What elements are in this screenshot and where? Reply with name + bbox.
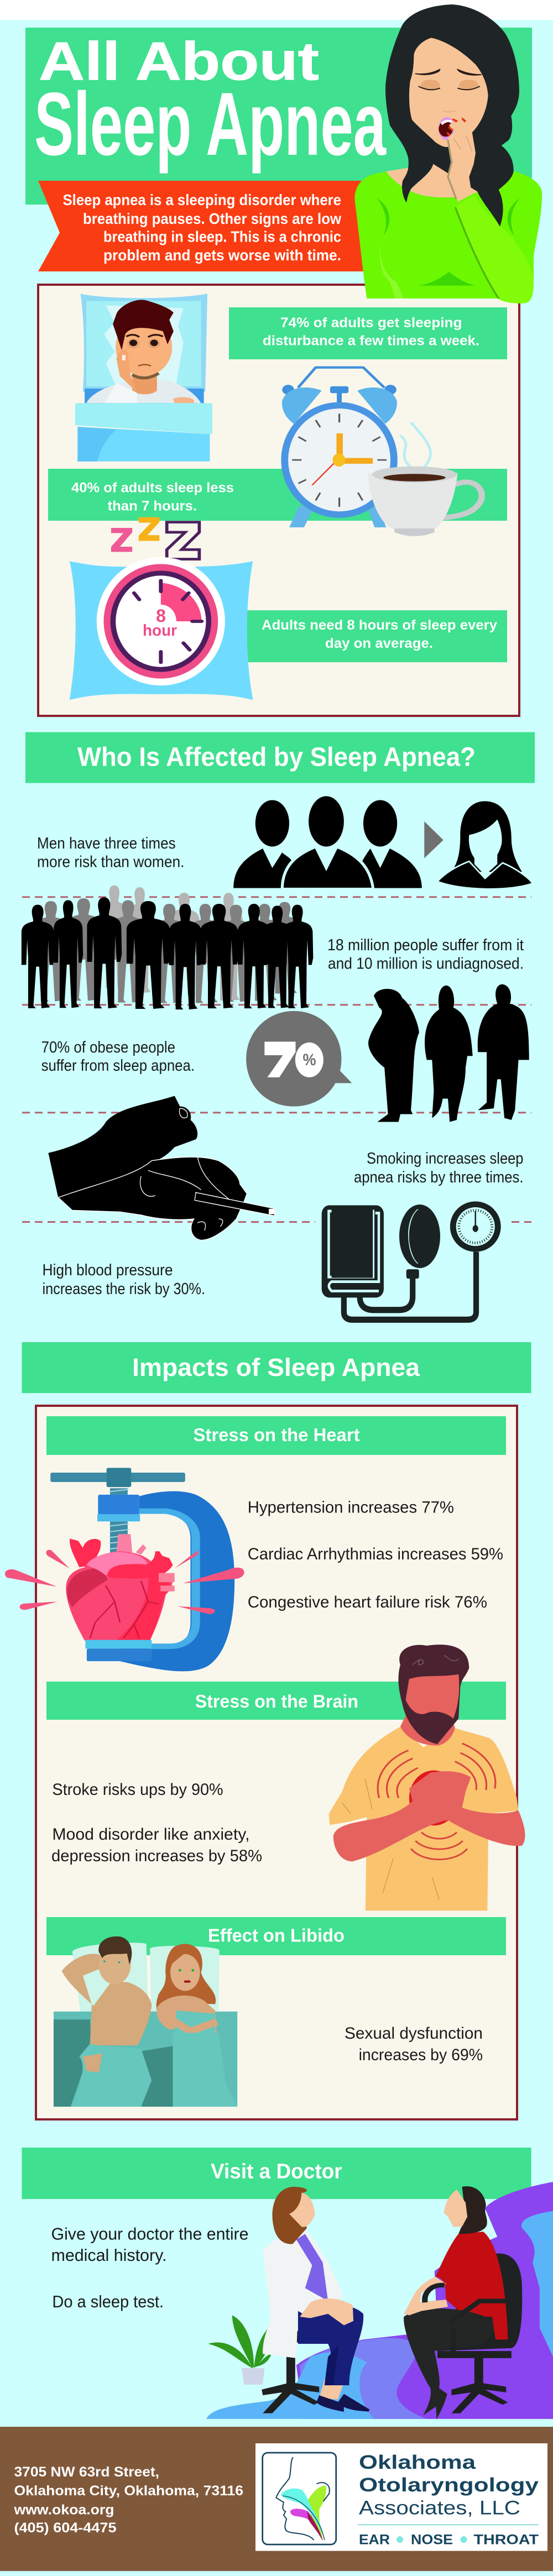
speech bubble: 7%: [246, 1011, 352, 1107]
title: Sleep Apnea: Sleep Apnea: [34, 74, 387, 174]
text: doctor advice: Give your doctor the entire: [51, 2224, 249, 2243]
illustration: man clutching chest: [328, 1645, 525, 1910]
icon: pillow with 8 hour clock: hour: [143, 622, 177, 640]
section heading: visit a doctor: Visit a Doctor: [211, 2160, 342, 2183]
icon: tired man in bed: [75, 294, 212, 462]
text: doctor advice: Do a sleep test.: [52, 2292, 164, 2311]
speech bubble: 7%: %: [303, 1051, 316, 1069]
intro ribbon: problem and gets worse with time.: [103, 247, 341, 264]
logo icon: nose and throat profile: [263, 2453, 336, 2544]
panel: impacts: [5, 1406, 525, 2119]
patient: [404, 2186, 522, 2420]
text: blood pressure: High blood pressure: [42, 1261, 173, 1279]
panel: sleep statistics: [38, 285, 519, 716]
icon: obese people silhouettes: [368, 985, 529, 1122]
stat box: 40%: 40% of adults sleep less: [71, 480, 234, 496]
text: blood pressure: increases the risk by 30%.: [42, 1280, 205, 1298]
icon: crowd silhouettes: [22, 886, 313, 1009]
footer: [0, 2427, 553, 2571]
text: smoking: [354, 1150, 523, 1186]
text: sexual dysfunction: [345, 2024, 483, 2064]
text: sexual dysfunction: increases by 69%: [359, 2046, 483, 2064]
stat box: 74%: [229, 307, 507, 359]
text: 18 million: and 10 million is undiagnosed.: [328, 955, 524, 973]
text: obese: suffer from sleep apnea.: [41, 1057, 195, 1075]
list: brain risks: Stroke risks ups by 90%: [52, 1781, 223, 1799]
text: obese: [41, 1039, 195, 1075]
list: brain risks: [51, 1781, 262, 1865]
logo text: Associates, LLC: [359, 2498, 520, 2519]
icon: three men versus woman: [233, 796, 533, 889]
logo text: EAR: [359, 2532, 390, 2548]
contact details: (405) 604-4475: [14, 2520, 117, 2536]
background blobs: [206, 2182, 553, 2419]
text: sexual dysfunction: Sexual dysfunction: [345, 2024, 483, 2043]
section heading: who is affected: Who Is Affected by Sleep Apnea?: [77, 743, 476, 772]
subheading: brain: [46, 1682, 506, 1720]
title panel: [25, 28, 532, 205]
stat box: 74%: disturbance a few times a week.: [263, 333, 479, 348]
intro ribbon: Sleep apnea is a sleeping disorder where: [63, 191, 341, 208]
subheading: libido: Effect on Libido: [208, 1925, 345, 1946]
list: heart risks: Cardiac Arrhythmias increases 59%: [248, 1545, 503, 1563]
contact details: Oklahoma City, Oklahoma, 73116: [14, 2483, 243, 2499]
icon: coffee cup: [368, 422, 482, 536]
text: men risk: Men have three times: [37, 835, 176, 852]
text: 18 million: 18 million people suffer from it: [327, 936, 524, 954]
illustration: heart in clamp: [5, 1468, 244, 1671]
contact details: www.okoa.org: [13, 2502, 114, 2517]
icon: alarm clock: [281, 368, 398, 527]
section heading: visit a doctor: [22, 2148, 531, 2199]
list: brain risks: Mood disorder like anxiety,: [52, 1825, 250, 1844]
stat box: 8 hours: day on average.: [325, 636, 433, 651]
text: 18 million: [327, 936, 524, 973]
icon: smoking hands: [48, 1096, 276, 1240]
logo: [255, 2443, 547, 2551]
stat box: 8 hours: Adults need 8 hours of sleep every: [262, 617, 497, 633]
illustration: couple in bed: [54, 1936, 237, 2107]
subheading: libido: [46, 1917, 506, 1955]
stat box: 8 hours: [245, 610, 507, 662]
text: men risk: [37, 835, 185, 871]
section heading: impacts: Impacts of Sleep Apnea: [132, 1353, 420, 1381]
text: smoking: Smoking increases sleep: [367, 1150, 523, 1167]
contact details: 3705 NW 63rd Street,: [14, 2464, 159, 2480]
subheading: heart: [46, 1416, 506, 1455]
logo text: Oklahoma: [359, 2452, 476, 2473]
stat box: 40%: than 7 hours.: [107, 499, 197, 514]
text: smoking: apnea risks by three times.: [354, 1169, 523, 1186]
contact details: [13, 2464, 243, 2536]
illustration: doctor and patient: [206, 2182, 553, 2420]
title: All About: All About: [39, 31, 319, 91]
icon: zzz letters: [111, 517, 199, 559]
list: heart risks: Hypertension increases 77%: [248, 1499, 454, 1517]
text: men risk: more risk than women.: [37, 854, 185, 871]
text: obese: 70% of obese people: [41, 1039, 175, 1056]
text: doctor advice: [51, 2224, 249, 2311]
logo text: Otolaryngology: [359, 2474, 539, 2496]
stat box: 74%: 74% of adults get sleeping: [280, 315, 462, 331]
intro ribbon: breathing pauses. Other signs are low: [83, 210, 341, 227]
list: heart risks: [248, 1499, 503, 1611]
icon: pillow with 8 hour clock: [70, 557, 253, 700]
stat box: 40%: [48, 469, 507, 521]
subheading: brain: Stress on the Brain: [195, 1691, 358, 1711]
doctor: [262, 2187, 369, 2413]
text: doctor advice: medical history.: [51, 2245, 167, 2265]
list: heart risks: Congestive heart failure risk 76%: [248, 1593, 487, 1611]
intro ribbon: breathing in sleep. This is a chronic: [103, 228, 341, 245]
logo text: THROAT: [473, 2532, 539, 2548]
logo text: NOSE: [411, 2532, 453, 2548]
plant: [208, 2315, 272, 2385]
illustration: yawning woman: [354, 4, 542, 303]
subheading: heart: Stress on the Heart: [194, 1425, 360, 1445]
section heading: impacts: [22, 1342, 531, 1393]
list: brain risks: depression increases by 58%: [51, 1847, 262, 1865]
logo text: [358, 2452, 539, 2548]
section heading: who is affected: [25, 732, 535, 783]
icon: pillow with 8 hour clock: 8: [156, 606, 166, 626]
text: blood pressure: [42, 1261, 205, 1298]
icon: blood pressure monitor: [322, 1201, 501, 1320]
intro ribbon: [38, 181, 371, 271]
